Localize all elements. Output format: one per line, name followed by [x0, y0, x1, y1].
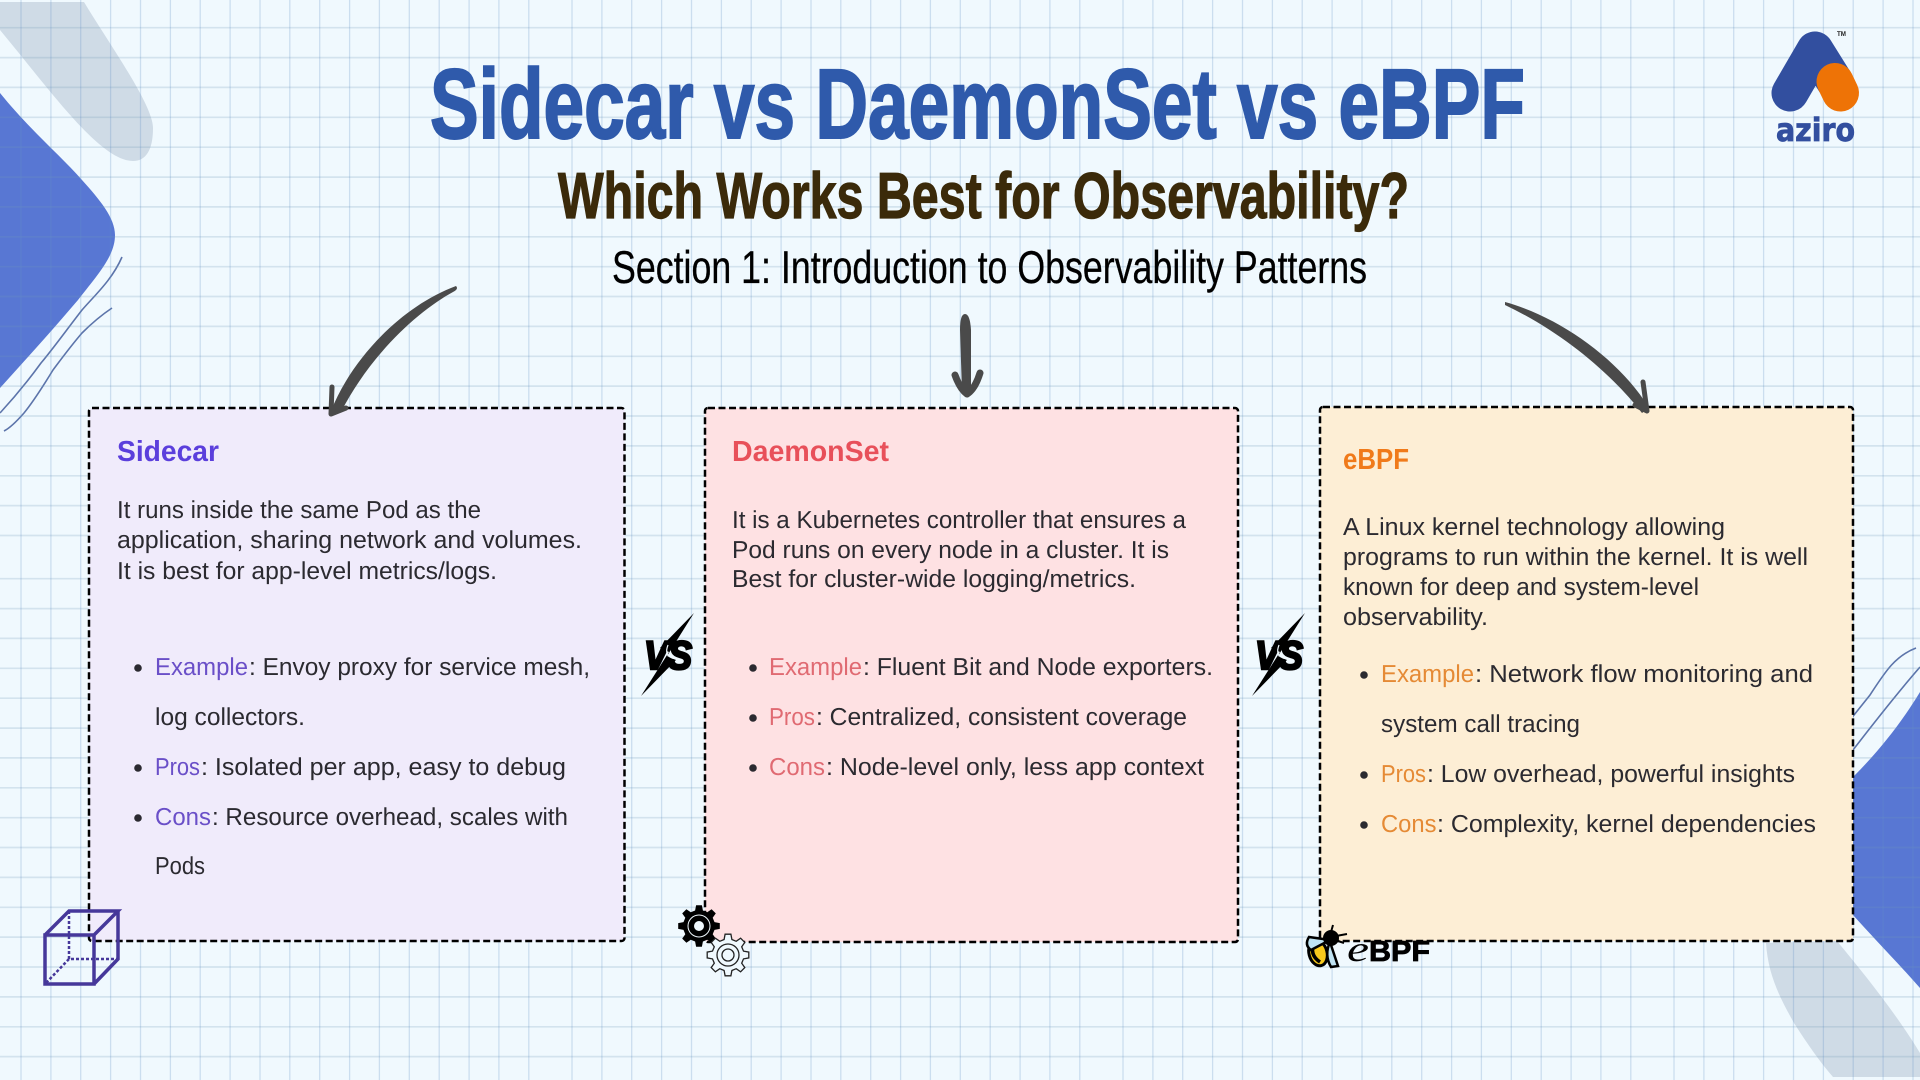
- arrow: to sidecar: [331, 286, 457, 414]
- sidecar bullet list: Cons: [155, 804, 211, 831]
- daemonset bullet list: Cons: [769, 754, 825, 781]
- logo: aziro: aziro: [1776, 111, 1855, 149]
- daemonset bullet list: [749, 654, 1213, 781]
- ebpf bullet list: : Network flow monitoring and: [1475, 661, 1813, 688]
- daemonset description: [732, 507, 1186, 593]
- daemonset description: Pod runs on every node in a cluster. It is: [732, 537, 1169, 564]
- icon: ebpf bee logo: e: [1347, 929, 1369, 969]
- icon: gears: [678, 905, 749, 976]
- logo: aziro: TM: [1837, 31, 1846, 38]
- ebpf description: observability.: [1343, 604, 1488, 631]
- decoration: grey blob top left: [0, 2, 153, 161]
- panel: daemonset: [705, 408, 1238, 942]
- sidecar bullet list: : Isolated per app, easy to debug: [201, 754, 566, 781]
- daemonset bullet list: Example: [769, 654, 862, 681]
- ebpf bullet list: Cons: [1381, 811, 1436, 838]
- decoration: blue blob right: [1810, 692, 1920, 988]
- sidecar description: It runs inside the same Pod as the: [117, 497, 481, 524]
- daemonset heading: DaemonSet: [732, 436, 889, 468]
- ebpf description: known for deep and system-level: [1343, 574, 1699, 601]
- arrow: to ebpf: [1505, 302, 1649, 413]
- sidecar description: [117, 497, 582, 585]
- sidecar description: application, sharing network and volumes.: [117, 527, 582, 554]
- sidecar heading: Sidecar: [117, 436, 219, 468]
- decoration: blue blob left: [0, 93, 115, 388]
- sidecar description: It is best for app-level metrics/logs.: [117, 558, 497, 585]
- icon: ebpf bee logo: BPF: [1369, 936, 1430, 968]
- title: Sidecar vs DaemonSet vs eBPF: [430, 48, 1525, 159]
- panel: sidecar: [89, 408, 624, 941]
- daemonset description: It is a Kubernetes controller that ensures a: [732, 507, 1186, 534]
- ebpf bullet list: Example: [1381, 661, 1474, 688]
- daemonset bullet list: : Node-level only, less app context: [826, 754, 1204, 781]
- sidecar bullet list: Pros: [155, 754, 200, 781]
- daemonset bullet list: : Centralized, consistent coverage: [816, 704, 1187, 731]
- ebpf heading: eBPF: [1343, 444, 1409, 476]
- arrow: to daemonset: [955, 314, 980, 394]
- icon: vs badge left: VS: [644, 634, 692, 678]
- daemonset description: Best for cluster-wide logging/metrics.: [732, 566, 1136, 593]
- decoration: grey blob bottom right: [1766, 941, 1920, 1077]
- sidecar bullet list: Pods: [155, 853, 205, 880]
- ebpf bullet list: Pros: [1381, 761, 1426, 788]
- ebpf bullet list: : Complexity, kernel dependencies: [1437, 811, 1816, 838]
- decoration: thin curves left: [0, 257, 122, 431]
- section heading: Section 1: Introduction to Observability Patterns: [612, 241, 1367, 293]
- ebpf bullet list: : Low overhead, powerful insights: [1427, 761, 1795, 788]
- subtitle: Which Works Best for Observability?: [558, 159, 1409, 232]
- ebpf description: programs to run within the kernel. It is well: [1343, 544, 1808, 571]
- sidecar bullet list: : Envoy proxy for service mesh,: [249, 654, 590, 681]
- icon: vs badge left: [641, 613, 694, 696]
- decoration: thin curves right: [1830, 648, 1920, 778]
- icon: cube: [45, 911, 118, 984]
- daemonset bullet list: Pros: [769, 704, 815, 731]
- sidecar bullet list: : Resource overhead, scales with: [212, 804, 568, 831]
- logo: aziro: [1776, 31, 1855, 149]
- daemonset bullet list: : Fluent Bit and Node exporters.: [863, 654, 1213, 681]
- sidecar bullet list: [134, 654, 590, 880]
- icon: vs badge right: VS: [1255, 634, 1303, 678]
- sidecar bullet list: Example: [155, 654, 248, 681]
- ebpf bullet list: [1360, 661, 1816, 838]
- ebpf description: A Linux kernel technology allowing: [1343, 514, 1725, 541]
- ebpf bullet list: system call tracing: [1381, 711, 1580, 738]
- panel: ebpf: [1320, 407, 1853, 941]
- icon: vs badge right: [1252, 613, 1305, 696]
- icon: ebpf bee logo: [1306, 925, 1430, 969]
- sidecar bullet list: log collectors.: [155, 704, 305, 731]
- ebpf description: [1343, 514, 1808, 631]
